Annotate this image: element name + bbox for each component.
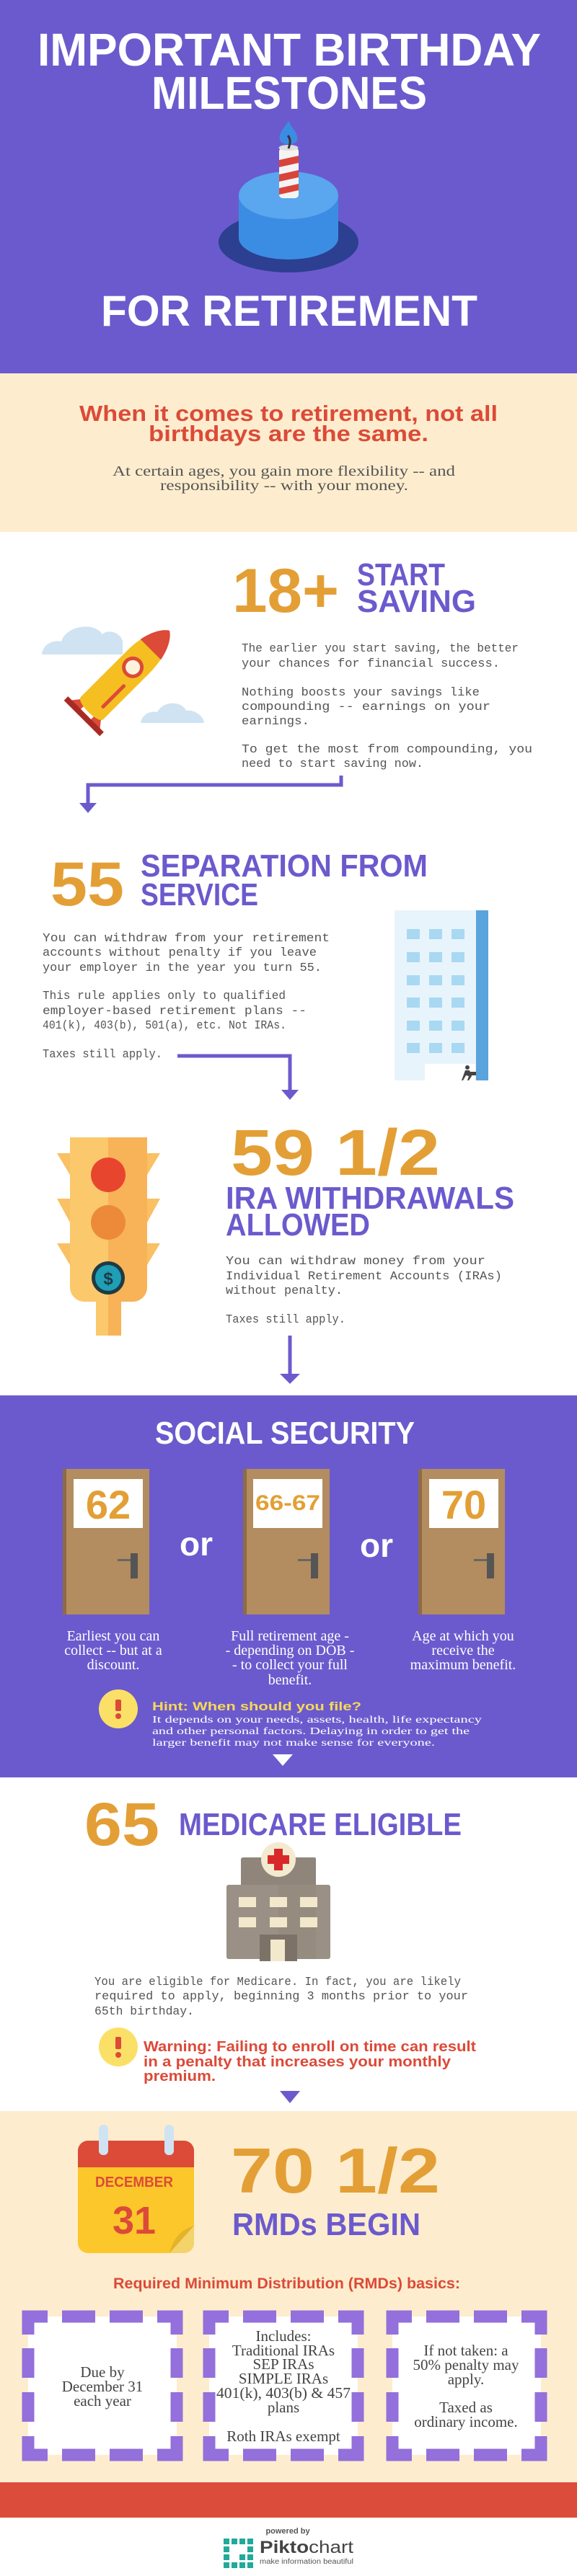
title: IMPORTANT BIRTHDAY <box>38 24 541 76</box>
box: penalty <box>387 2317 547 2455</box>
arrow: triangle <box>280 2091 300 2103</box>
text: saving <box>242 642 532 771</box>
icon: calendar: 31 <box>113 2199 156 2242</box>
text: separation: You can withdraw from your retirement <box>43 932 330 946</box>
subtitle: for retirement: FOR RETIREMENT <box>101 287 477 335</box>
age 65: 65 <box>84 1790 159 1858</box>
hint callout: larger benefit may not make sense for everyone. <box>152 1738 435 1749</box>
text: separation <box>43 932 330 1062</box>
panel: 65 medicare <box>84 1790 476 2103</box>
panel: 59 1/2 ira withdrawals <box>57 1117 514 1336</box>
door: 70: 70 <box>441 1482 486 1527</box>
icon: exclamation <box>99 2028 138 2066</box>
door: 62: 62 <box>86 1482 131 1527</box>
icon: traffic light: $ <box>103 1269 113 1289</box>
or: or <box>360 1527 393 1564</box>
warning callout: premium. <box>144 2069 216 2084</box>
box: penalty: If not taken: a <box>423 2342 508 2359</box>
text: saving: The earlier you start saving, the better <box>242 642 519 656</box>
text: saving: your chances for financial success. <box>242 657 500 671</box>
icon: calendar: DECEMBER <box>95 2175 174 2190</box>
box: penalty: apply. <box>448 2371 484 2388</box>
captions <box>64 1628 516 1688</box>
text: saving: Nothing boosts your savings like <box>242 686 480 700</box>
text: separation: accounts without penalty if you leave <box>43 946 317 960</box>
text: ira: Individual Retirement Accounts (IRAs) <box>226 1270 502 1284</box>
icon: birthday cake <box>219 121 358 272</box>
age 70 1/2: 70 1/2 <box>231 2135 440 2206</box>
or: or <box>180 1525 213 1563</box>
box: penalty: Taxed as <box>439 2399 493 2416</box>
icon: calendar <box>78 2125 194 2253</box>
captions: maximum benefit. <box>410 1657 516 1673</box>
box: included plans: SEP IRAs <box>252 2355 314 2373</box>
arrow: white triangle <box>273 1754 293 1766</box>
box: penalty: 50% penalty may <box>413 2356 519 2373</box>
text: medicare: You are eligible for Medicare. In fact, you are likely <box>94 1976 461 1989</box>
captions: Full retirement age - <box>231 1628 349 1644</box>
panel: intro <box>0 373 577 532</box>
text: separation: your employer in the year you turn 55. <box>43 961 322 975</box>
age 18+: 18+ <box>232 556 339 626</box>
captions: collect -- but at a <box>64 1643 162 1658</box>
hint callout <box>99 1689 482 1749</box>
footer: piktochart logo: Pikto chart <box>260 2538 353 2557</box>
arrow: to 55 <box>79 776 341 813</box>
box: due date: Due by <box>80 2363 125 2381</box>
panel: social security <box>0 1395 577 1777</box>
door: 62 <box>63 1469 149 1615</box>
footer band <box>0 2482 577 2518</box>
text: ira <box>226 1255 502 1327</box>
intro text: responsibility -- with your money. <box>160 478 408 494</box>
hint callout: Hint: When should you file? <box>152 1700 361 1713</box>
door: 66-67 <box>243 1469 330 1615</box>
icon: traffic light <box>57 1137 160 1336</box>
icon: rocket with clouds <box>42 613 204 736</box>
heading: start saving: SAVING <box>357 584 476 619</box>
title: MILESTONES <box>151 67 427 119</box>
text: medicare: 65th birthday. <box>94 2005 194 2019</box>
icon: exclamation <box>99 1689 138 1728</box>
heading: separation from service <box>141 848 428 912</box>
captions: - depending on DOB - <box>226 1643 354 1658</box>
icon: office building <box>395 910 488 1080</box>
box: included plans: Includes: <box>256 2327 311 2345</box>
text: separation: This rule applies only to qualified <box>43 990 286 1003</box>
door: 70 <box>418 1469 505 1615</box>
heading: rmds begin: RMDs BEGIN <box>232 2207 420 2242</box>
icon: hospital <box>226 1842 330 1961</box>
captions: benefit. <box>268 1672 312 1688</box>
captions: receive the <box>431 1643 495 1658</box>
text: separation: employer-based retirement plans -- <box>43 1005 307 1018</box>
captions: discount. <box>87 1657 139 1673</box>
text: ira: You can withdraw money from your <box>226 1255 485 1269</box>
heading: separation from service: SEPARATION FROM <box>141 848 428 884</box>
rmd basics heading: Required Minimum Distribution (RMDs) basics: <box>113 2275 460 2292</box>
heading: ira withdrawals allowed <box>226 1181 514 1243</box>
intro headline <box>79 401 498 446</box>
footer: piktochart logo <box>224 2527 353 2568</box>
age 55: 55 <box>50 850 124 919</box>
footer: piktochart logo: make information beautiful <box>260 2558 353 2566</box>
heading: ira withdrawals allowed: ALLOWED <box>226 1207 370 1243</box>
heading: start saving <box>357 557 476 619</box>
intro headline: When it comes to retirement, not all <box>79 401 498 426</box>
heading: social security: SOCIAL SECURITY <box>155 1416 415 1451</box>
box: included plans: 401(k), 403(b) & 457 <box>216 2384 351 2402</box>
warning callout <box>99 2028 476 2084</box>
box: penalty: ordinary income. <box>414 2413 518 2430</box>
box: due date <box>22 2317 183 2455</box>
footer: piktochart logo: powered by <box>265 2527 310 2536</box>
heading: separation from service: SERVICE <box>141 877 258 912</box>
arrow: to 59 1/2 <box>177 1056 299 1100</box>
text: ira: without penalty. <box>226 1284 343 1298</box>
warning callout: in a penalty that increases your monthly <box>144 2054 452 2070</box>
box: included plans: Roth IRAs exempt <box>226 2428 340 2445</box>
header panel <box>0 0 577 373</box>
text: saving: need to start saving now. <box>242 758 423 771</box>
intro headline: birthdays are the same. <box>149 421 428 446</box>
panel: 18+ start saving <box>42 556 532 771</box>
text: ira: Taxes still apply. <box>226 1313 345 1327</box>
text: medicare: required to apply, beginning 3 months prior to your <box>94 1990 468 2004</box>
text: saving: earnings. <box>242 715 309 729</box>
text: separation: Taxes still apply. <box>43 1048 162 1062</box>
panel: 70 1/2 rmds <box>0 2111 577 2482</box>
box: included plans <box>203 2317 364 2455</box>
age 59 1/2: 59 1/2 <box>231 1117 440 1189</box>
captions: - to collect your full <box>232 1657 348 1673</box>
box: included plans: SIMPLE IRAs <box>239 2370 328 2387</box>
text: separation: 401(k), 403(b), 501(a), etc. Not IRAs. <box>43 1019 286 1033</box>
warning callout: Warning: Failing to enroll on time can result <box>144 2039 476 2055</box>
heading: ira withdrawals allowed: IRA WITHDRAWALS <box>226 1181 514 1216</box>
heading: medicare eligible: MEDICARE ELIGIBLE <box>179 1807 462 1842</box>
intro text <box>113 463 455 494</box>
title <box>38 24 541 119</box>
panel: 55 separation from service <box>43 848 488 1080</box>
box: due date: December 31 <box>62 2378 143 2395</box>
heading: start saving: START <box>357 557 445 592</box>
box: included plans: Traditional IRAs <box>232 2342 335 2359</box>
arrow: to social security <box>280 1336 300 1384</box>
box: due date: each year <box>74 2392 131 2410</box>
box: included plans: plans <box>268 2399 299 2416</box>
captions: Earliest you can <box>67 1628 159 1644</box>
captions: Age at which you <box>412 1628 514 1644</box>
text: saving: To get the most from compounding, you <box>242 743 532 757</box>
hint callout: It depends on your needs, assets, health, life expectancy <box>152 1715 482 1726</box>
text: medicare <box>94 1976 468 2019</box>
door: 66-67: 66-67 <box>255 1491 320 1515</box>
hint callout: and other personal factors. Delaying in order to get the <box>152 1726 470 1737</box>
intro text: At certain ages, you gain more flexibility -- and <box>113 463 455 479</box>
text: saving: compounding -- earnings on your <box>242 701 490 714</box>
